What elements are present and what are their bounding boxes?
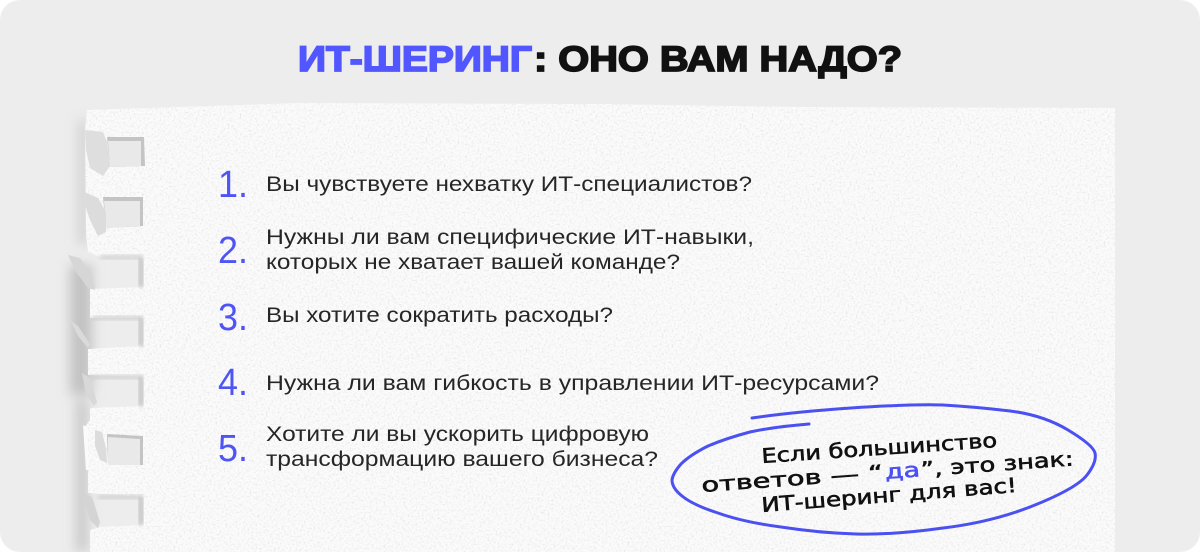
title: : ОНО ВАМ НАДО? xyxy=(534,40,902,79)
question 3 xyxy=(219,304,612,330)
question 3: 3. xyxy=(218,297,248,339)
callout: hand-drawn oval xyxy=(672,405,1095,534)
question 1: 1. xyxy=(218,164,248,206)
question 4: Нужна ли вам гибкость в управлении ИТ-ресурсами? xyxy=(266,372,879,395)
callout text: да xyxy=(884,457,921,484)
question 2 xyxy=(218,226,754,274)
paper sheet xyxy=(84,103,1115,552)
question 4 xyxy=(218,368,878,395)
question 1 xyxy=(220,170,752,197)
question 2: которых не хватает вашей команде? xyxy=(266,251,680,274)
question 5 xyxy=(218,423,658,471)
title xyxy=(300,45,901,79)
callout text: ”, это знак: xyxy=(920,446,1074,481)
title: ИТ-ШЕРИНГ xyxy=(298,40,532,79)
torn flaps xyxy=(68,130,110,528)
paper grain xyxy=(80,100,1120,552)
question 2: Нужны ли вам специфические ИТ-навыки, xyxy=(266,226,754,249)
callout text: ИТ-шеринг для вас! xyxy=(761,473,1018,517)
oval stroke xyxy=(672,405,1095,534)
question 5: трансформацию вашего бизнеса? xyxy=(266,448,658,471)
hole 6 xyxy=(107,434,143,465)
paper shadow xyxy=(70,120,92,552)
hole 1 xyxy=(107,137,145,167)
question 5: 5. xyxy=(218,428,248,470)
question 3: Вы хотите сократить расходы? xyxy=(266,304,613,327)
hole 2 xyxy=(103,197,143,228)
question 4: 4. xyxy=(218,362,248,404)
question 2: 2. xyxy=(218,230,248,272)
callout text: Если большинство xyxy=(761,428,998,468)
callout text: ответов — “ xyxy=(701,460,884,497)
question 5: Хотите ли вы ускорить цифровую xyxy=(266,423,649,446)
question 1: Вы чувствуете нехватку ИТ-специалистов? xyxy=(266,173,752,196)
panel: torn notebook paper xyxy=(68,100,1120,552)
callout text xyxy=(702,436,1072,512)
holes: inner shading xyxy=(90,255,143,525)
